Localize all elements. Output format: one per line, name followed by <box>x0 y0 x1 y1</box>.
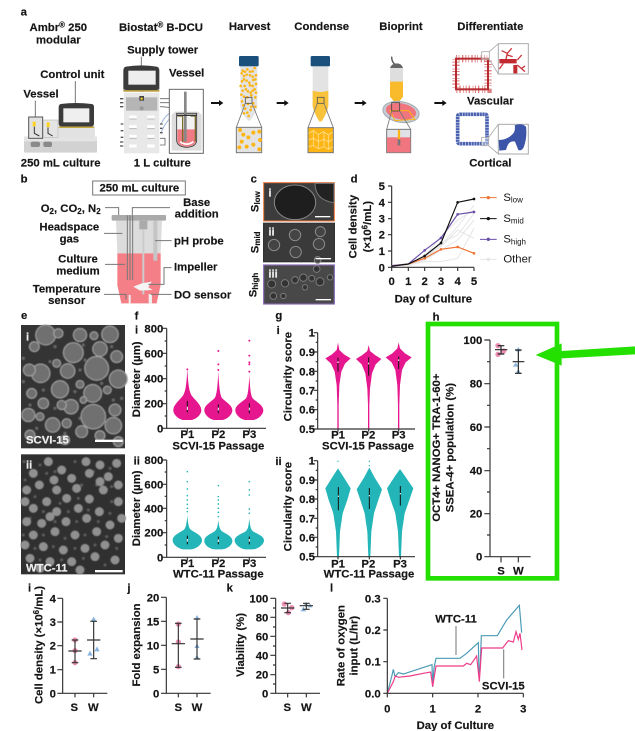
chart j: fold expansion: j <box>126 582 130 594</box>
violin chart g-ii: 0.6 <box>299 532 315 544</box>
chart i: cell density: /mL) <box>33 586 45 610</box>
chart j: fold expansion: Fold expansion <box>131 603 143 687</box>
chart j: fold expansion: 0 <box>153 688 159 700</box>
label: Temperature sensor: Temperature <box>33 283 101 295</box>
violin chart g-ii: 1 <box>309 456 315 468</box>
label: Temperature sensor: sensor <box>48 295 86 307</box>
violin chart f-i: 400 <box>144 374 163 386</box>
chart k: viability: 100 <box>249 593 268 605</box>
chart k: viability: 60 <box>256 631 268 643</box>
label: Base addition: Base <box>183 197 210 209</box>
tick labels: 3 <box>379 214 385 226</box>
arrow: to differentiate <box>434 100 447 106</box>
heading: Condense: Condense <box>294 21 349 33</box>
legend: low <box>511 196 523 205</box>
y axis title: (×10 <box>362 229 374 252</box>
chart k: viability: 20 <box>256 670 268 682</box>
label: gases: , CO <box>54 203 77 215</box>
legend: S <box>503 213 511 225</box>
tick labels: 1 <box>405 276 411 288</box>
violin chart g-ii: 0.9 <box>299 475 315 487</box>
violin chart g-ii: P3 <box>393 559 407 571</box>
tick labels <box>365 593 526 715</box>
axes <box>383 598 523 697</box>
chart i: cell density: 6 <box>32 609 41 614</box>
violin chart g-ii <box>283 456 415 581</box>
title box: 250 mL culture: 250 mL culture <box>99 182 179 194</box>
violin chart f-i: P2 <box>211 429 225 441</box>
panel letter g: g <box>275 310 282 322</box>
chart i: cell density: W <box>88 702 99 714</box>
heading: Ambr 250 modular: Ambr <box>30 22 59 34</box>
label: gases: 2 <box>96 207 101 216</box>
chart h: pluripotency marker population: W <box>513 565 524 577</box>
tick labels: 3 <box>520 703 526 715</box>
label: Vascular: Vascular <box>467 95 514 107</box>
chart j: fold expansion: W <box>192 702 203 714</box>
chart h: pluripotency marker population: OCT4+ NANOG+ TRA-1-60+ <box>431 374 443 522</box>
panel letter b: b <box>21 174 28 186</box>
violin chart g-ii: 0.5 <box>299 552 315 564</box>
legend: Other <box>503 254 532 266</box>
arrow: to harvest <box>211 100 223 106</box>
leader lines: vessel callouts <box>104 208 172 299</box>
tick labels: 0.2 <box>365 625 381 637</box>
series: S low <box>392 247 474 266</box>
violin chart f-ii: P3 <box>242 558 256 570</box>
icon: cortical construct <box>458 114 528 154</box>
chart h: pluripotency marker population: 80 <box>470 379 482 391</box>
violin chart g-ii: 0.7 <box>299 513 315 525</box>
violin chart g-i: Circularity score <box>283 332 295 421</box>
chart i: cell density: S <box>71 702 79 714</box>
legend: mid <box>511 217 524 226</box>
panel c: aggregate micrographs <box>247 174 334 304</box>
violin chart f-ii: P1 <box>180 558 194 570</box>
label: Vessel (Ambr): Vessel <box>23 88 59 100</box>
tick labels: 5 <box>379 181 385 193</box>
label: Culture medium: Culture <box>58 254 98 266</box>
chart h: pluripotency marker population: 20 <box>470 509 482 521</box>
tick labels: 4 <box>379 197 386 209</box>
arrow: to bioprint <box>355 100 367 106</box>
heading: Harvest: Harvest <box>229 21 271 33</box>
label: S mid: S <box>249 246 261 253</box>
tick labels: 2 <box>422 276 428 288</box>
legend <box>480 192 532 266</box>
micrograph: SCVI-15: i <box>26 332 29 344</box>
tick labels: 5 <box>471 276 477 288</box>
violin chart g-i: SCVI-15 Passage <box>322 441 414 453</box>
chart i: cell density: 4 <box>50 593 57 605</box>
violin chart g-i: P2 <box>361 430 375 442</box>
micrograph: WTC-11 <box>21 454 125 575</box>
label: Headspace gas: Headspace <box>39 222 99 234</box>
sub-label g-ii: ii <box>275 456 282 468</box>
heading: Biostat B-DCU: B-DCU <box>163 22 203 34</box>
chart j: fold expansion: 20 <box>147 592 159 604</box>
violin chart g-i: 0.9 <box>299 347 315 359</box>
panel d: cell density line chart <box>348 174 532 305</box>
chart j: fold expansion: S <box>175 702 183 714</box>
micrograph: S high: iii <box>268 268 278 280</box>
violin chart f-i: 0 <box>157 423 163 435</box>
violin chart f-ii <box>131 455 266 581</box>
heading: Ambr 250 modular: ® <box>59 21 65 30</box>
violin chart g-i <box>283 328 415 453</box>
heading: Ambr 250 modular: modular <box>36 34 81 46</box>
label: SCVI-15: SCVI-15 <box>482 680 525 692</box>
label: Supply tower: Supply tower <box>127 44 199 56</box>
violin chart f-ii: 600 <box>144 479 163 491</box>
arrow: to condense <box>277 100 289 106</box>
panel e and f <box>21 310 266 581</box>
panel g and h <box>275 310 635 581</box>
violin chart g-i: 0.8 <box>299 366 315 378</box>
chart i: cell density: 1 <box>50 665 56 677</box>
violin chart f-i: 200 <box>144 399 163 411</box>
chart k: viability: k <box>227 582 234 594</box>
arrow: green highlight <box>536 343 635 366</box>
label: Control unit: Control unit <box>40 69 105 81</box>
chart j: fold expansion: 5 <box>153 664 159 676</box>
violin chart f-i: Diameter (µm) <box>131 341 143 417</box>
heading: Differentiate: Differentiate <box>457 21 523 33</box>
violin chart g-ii: P1 <box>331 559 345 571</box>
violin chart f-ii: 200 <box>144 528 163 540</box>
micrograph: SCVI-15: SCVI-15 <box>26 434 69 446</box>
icon: bioprint <box>381 57 421 153</box>
label: gases: 2 <box>50 207 55 216</box>
panel letter h: h <box>433 311 440 323</box>
violin chart f-ii: WTC-11 Passage <box>173 569 264 581</box>
tick labels: 0.1 <box>365 657 381 669</box>
label: gases: O <box>41 203 50 215</box>
label: S low: S <box>249 205 261 212</box>
series: S mid <box>392 199 474 266</box>
y axis title: 6 <box>361 224 370 229</box>
label: gases: 2 <box>77 207 82 216</box>
chart i: cell density: 0 <box>50 688 56 700</box>
tick labels: 2 <box>475 703 481 715</box>
tick labels: 3 <box>438 276 444 288</box>
label: WTC-11: WTC-11 <box>435 614 477 626</box>
tick labels: 1 <box>430 703 436 715</box>
series: S high <box>392 212 474 266</box>
tick labels: 2 <box>379 230 385 242</box>
label: DO sensor: DO sensor <box>174 289 232 301</box>
panel letter f: f <box>135 311 139 323</box>
chart h: pluripotency marker population: S <box>497 565 505 577</box>
chart j: fold expansion <box>126 582 211 714</box>
chart k: viability: Viability (%) <box>235 613 247 677</box>
violin chart g-i: P1 <box>331 430 345 442</box>
icon: condense tube <box>308 56 333 153</box>
icon: Biostat supply tower <box>120 57 163 153</box>
legend: S <box>503 192 511 204</box>
chart h: pluripotency marker population <box>431 335 531 577</box>
violin chart g-i: 0.6 <box>299 405 315 417</box>
legend: S <box>503 234 511 246</box>
micrograph: WTC-11: ii <box>26 459 32 471</box>
panel letter a: a <box>21 7 28 19</box>
violin chart g-ii: WTC-11 Passage <box>324 569 414 581</box>
chart i: cell density: 3 <box>50 617 56 629</box>
label: S mid: mid <box>253 231 262 246</box>
highlight frame: green <box>428 324 557 578</box>
icon: harvest tube <box>236 56 262 153</box>
violin chart g-i: P3 <box>392 430 406 442</box>
tick labels <box>379 181 477 288</box>
bottom row panels i, j, k <box>28 582 320 714</box>
violin chart g-i: 0.5 <box>299 424 315 436</box>
tick labels: 0 <box>379 262 385 274</box>
panel letter e: e <box>21 310 27 322</box>
sub-label g-i: i <box>277 325 280 337</box>
tick labels: 4 <box>455 276 462 288</box>
label: S low: low <box>253 190 262 205</box>
chart i: cell density: i <box>28 582 31 594</box>
violin chart g-ii: Circularity score <box>283 462 295 551</box>
micrograph: S mid: ii <box>268 227 275 239</box>
panel a: Ambr and Biostat bioreactors <box>21 7 223 169</box>
axes <box>388 186 474 271</box>
panel letter l: l <box>330 582 333 594</box>
chart k: viability: 80 <box>256 612 268 624</box>
chart h: pluripotency marker population: SSEA-4+ population (%) <box>444 383 456 512</box>
y axis title: Rate of oxygen <box>335 605 347 686</box>
chart i: cell density: 2 <box>50 641 56 653</box>
label: Cortical: Cortical <box>469 158 511 170</box>
chart i: cell density: Cell density (×10 <box>33 614 45 704</box>
violin chart g-ii: P2 <box>361 559 375 571</box>
y axis title: /mL) <box>362 201 374 225</box>
violin chart g-i: 0.7 <box>299 385 315 397</box>
chart k: viability <box>227 582 320 714</box>
violin chart f-i: 800 <box>144 323 163 335</box>
other runs <box>392 205 474 266</box>
violin chart f-ii: 800 <box>144 455 163 467</box>
micrograph: S low: i <box>268 188 271 200</box>
label: Culture medium: medium <box>56 265 100 277</box>
y axis title: input (L/hr) <box>349 616 361 676</box>
label: pH probe: pH probe <box>174 236 224 248</box>
micrograph: SCVI-15 <box>21 325 127 448</box>
series: SCVI-15 <box>387 632 522 693</box>
violin chart f-i: SCVI-15 Passage <box>172 440 264 452</box>
violin chart f-ii: Diameter (µm) <box>131 470 143 546</box>
label: 250 mL culture: 250 mL culture <box>21 157 101 169</box>
chart k: viability: 0 <box>262 688 268 700</box>
chart h: pluripotency marker population: 0 <box>476 552 482 564</box>
micrograph: WTC-11: WTC-11 <box>26 563 68 575</box>
x axis title: Day of Culture <box>395 293 472 305</box>
tick labels: 1 <box>379 246 385 258</box>
violin chart f-i: 600 <box>144 348 163 360</box>
label: S high: S <box>247 290 259 297</box>
sub-label f-i: i <box>135 325 138 337</box>
chart h: pluripotency marker population: 40 <box>470 466 482 478</box>
label: S high: high <box>251 273 260 290</box>
label: gases: , N <box>82 203 96 215</box>
y axis title: Cell density <box>348 195 360 258</box>
legend: high <box>511 237 526 246</box>
panel letter d: d <box>351 174 358 186</box>
violin chart f-ii: 400 <box>144 503 163 515</box>
violin chart g-i: 1 <box>309 328 315 340</box>
panel b: 250 mL culture vessel schematic <box>21 174 232 307</box>
icon: vascular construct <box>456 44 528 89</box>
label: Base addition: addition <box>175 209 219 221</box>
icon: vessel <box>112 215 166 303</box>
label: Headspace gas: gas <box>60 234 79 246</box>
violin chart f-ii: P2 <box>211 558 225 570</box>
icon: Biostat vessel <box>160 89 203 153</box>
callout lines <box>456 626 504 678</box>
panel letter c: c <box>251 174 257 186</box>
chart h: pluripotency marker population: 60 <box>470 422 482 434</box>
label: 1 L culture: 1 L culture <box>134 157 191 169</box>
panel l: rate of oxygen input line chart <box>330 582 526 731</box>
chart h: pluripotency marker population: 100 <box>463 335 482 347</box>
heading: Ambr 250 modular: 250 <box>65 22 87 34</box>
violin chart f-i: P3 <box>242 429 256 441</box>
chart k: viability: 40 <box>256 650 268 662</box>
tick labels: 0.3 <box>365 593 381 605</box>
heading: Bioprint: Bioprint <box>379 21 423 33</box>
chart j: fold expansion: 15 <box>147 616 159 628</box>
panel a: harvest, condense, bioprint, differentiate <box>229 21 528 170</box>
chart k: viability: S <box>284 702 292 714</box>
label: Impeller: Impeller <box>174 262 218 274</box>
label: Vessel (Biostat): Vessel <box>169 67 204 79</box>
tick labels: 0 <box>384 703 390 715</box>
tick labels: 0 <box>389 276 395 288</box>
series: WTC-11 <box>387 605 522 693</box>
heading: Biostat B-DCU: Biostat <box>119 22 157 34</box>
violin chart f-ii: 0 <box>157 552 163 564</box>
chart j: fold expansion: 10 <box>147 640 159 652</box>
tick labels: 0.0 <box>365 688 381 700</box>
icon: Ambr system <box>24 81 97 153</box>
heading: Biostat B-DCU: ® <box>157 21 163 30</box>
sub-label f-ii: ii <box>134 455 140 467</box>
chart i: cell density <box>28 582 107 714</box>
violin chart g-ii: 0.8 <box>299 494 315 506</box>
violin chart f-i: P1 <box>180 429 194 441</box>
violin chart f-i <box>131 323 266 452</box>
chart k: viability: W <box>301 702 312 714</box>
